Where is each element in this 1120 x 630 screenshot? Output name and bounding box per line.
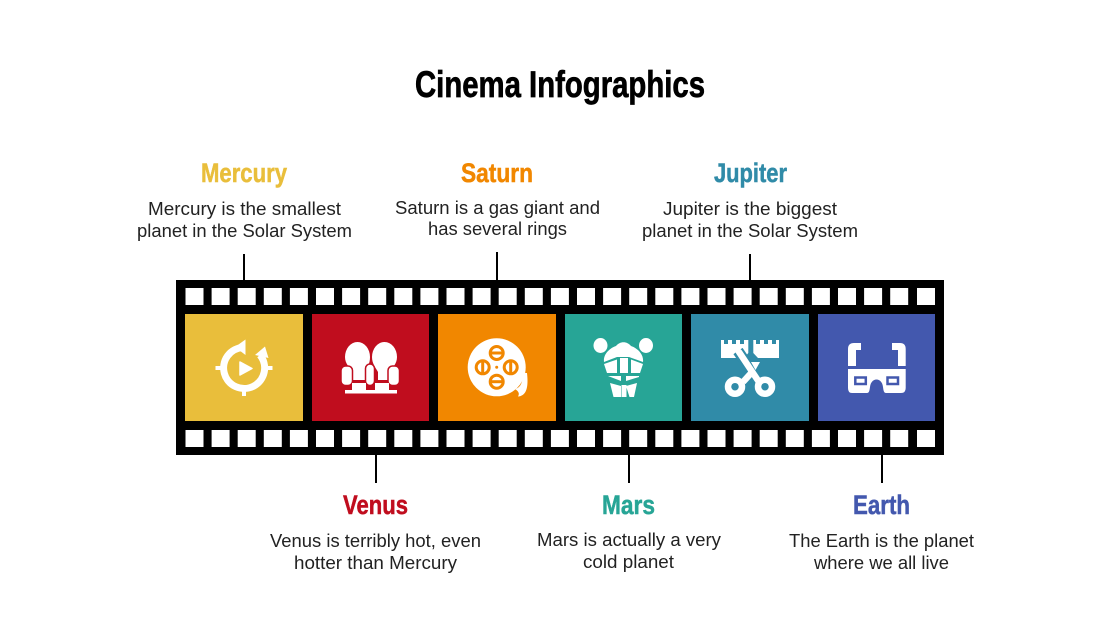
panel: Earth frame: [818, 314, 935, 421]
panel: Venus frame: [312, 314, 429, 421]
text block: Saturn: has several rings: [428, 219, 567, 239]
panel: Mars frame: [565, 314, 682, 421]
text block: Venus: Venus: [343, 490, 408, 520]
icon: 3D glasses: [848, 343, 906, 393]
text block: Mercury: Mercury: [201, 158, 287, 188]
connector lines: [243, 252, 883, 483]
icon: replay circle with play button: [216, 340, 272, 396]
text block: Jupiter: planet in the Solar System: [642, 221, 858, 241]
text block: Saturn: [395, 158, 600, 239]
text block: Jupiter: Jupiter is the biggest: [663, 199, 837, 219]
text block: Mercury: Mercury is the smallest: [148, 199, 341, 219]
text block: Venus: [270, 490, 481, 573]
icon: popcorn box: [594, 338, 653, 397]
text block: Mars: [537, 490, 721, 572]
text block: Jupiter: [642, 158, 858, 241]
icon: cinema seats: [341, 342, 400, 394]
text block: Mars: Mars: [602, 490, 655, 520]
text block: Jupiter: Jupiter: [714, 158, 787, 188]
title: Cinema Infographics: [415, 64, 705, 105]
text block: Mercury: [137, 158, 352, 241]
text block: Earth: The Earth is the planet: [789, 531, 974, 551]
text block: Saturn: Saturn is a gas giant and: [395, 198, 600, 218]
text block: Mars: Mars is actually a very: [537, 530, 721, 550]
film strip: [176, 280, 944, 455]
text block: Earth: where we all live: [813, 553, 949, 573]
text block: Venus: Venus is terribly hot, even: [270, 531, 481, 551]
panel: Saturn frame: [438, 314, 556, 421]
text block: Saturn: Saturn: [461, 158, 533, 188]
text block: Venus: hotter than Mercury: [294, 553, 457, 573]
text block: Mercury: planet in the Solar System: [137, 221, 352, 241]
icon: scissors and ruler: [721, 340, 779, 394]
text block: Mars: cold planet: [583, 552, 674, 572]
text block: Earth: [789, 490, 974, 573]
icon: film reel: [468, 338, 528, 396]
panel: Mercury frame: [185, 314, 303, 421]
text block: Earth: Earth: [853, 490, 910, 520]
panel: Jupiter frame: [691, 314, 809, 421]
